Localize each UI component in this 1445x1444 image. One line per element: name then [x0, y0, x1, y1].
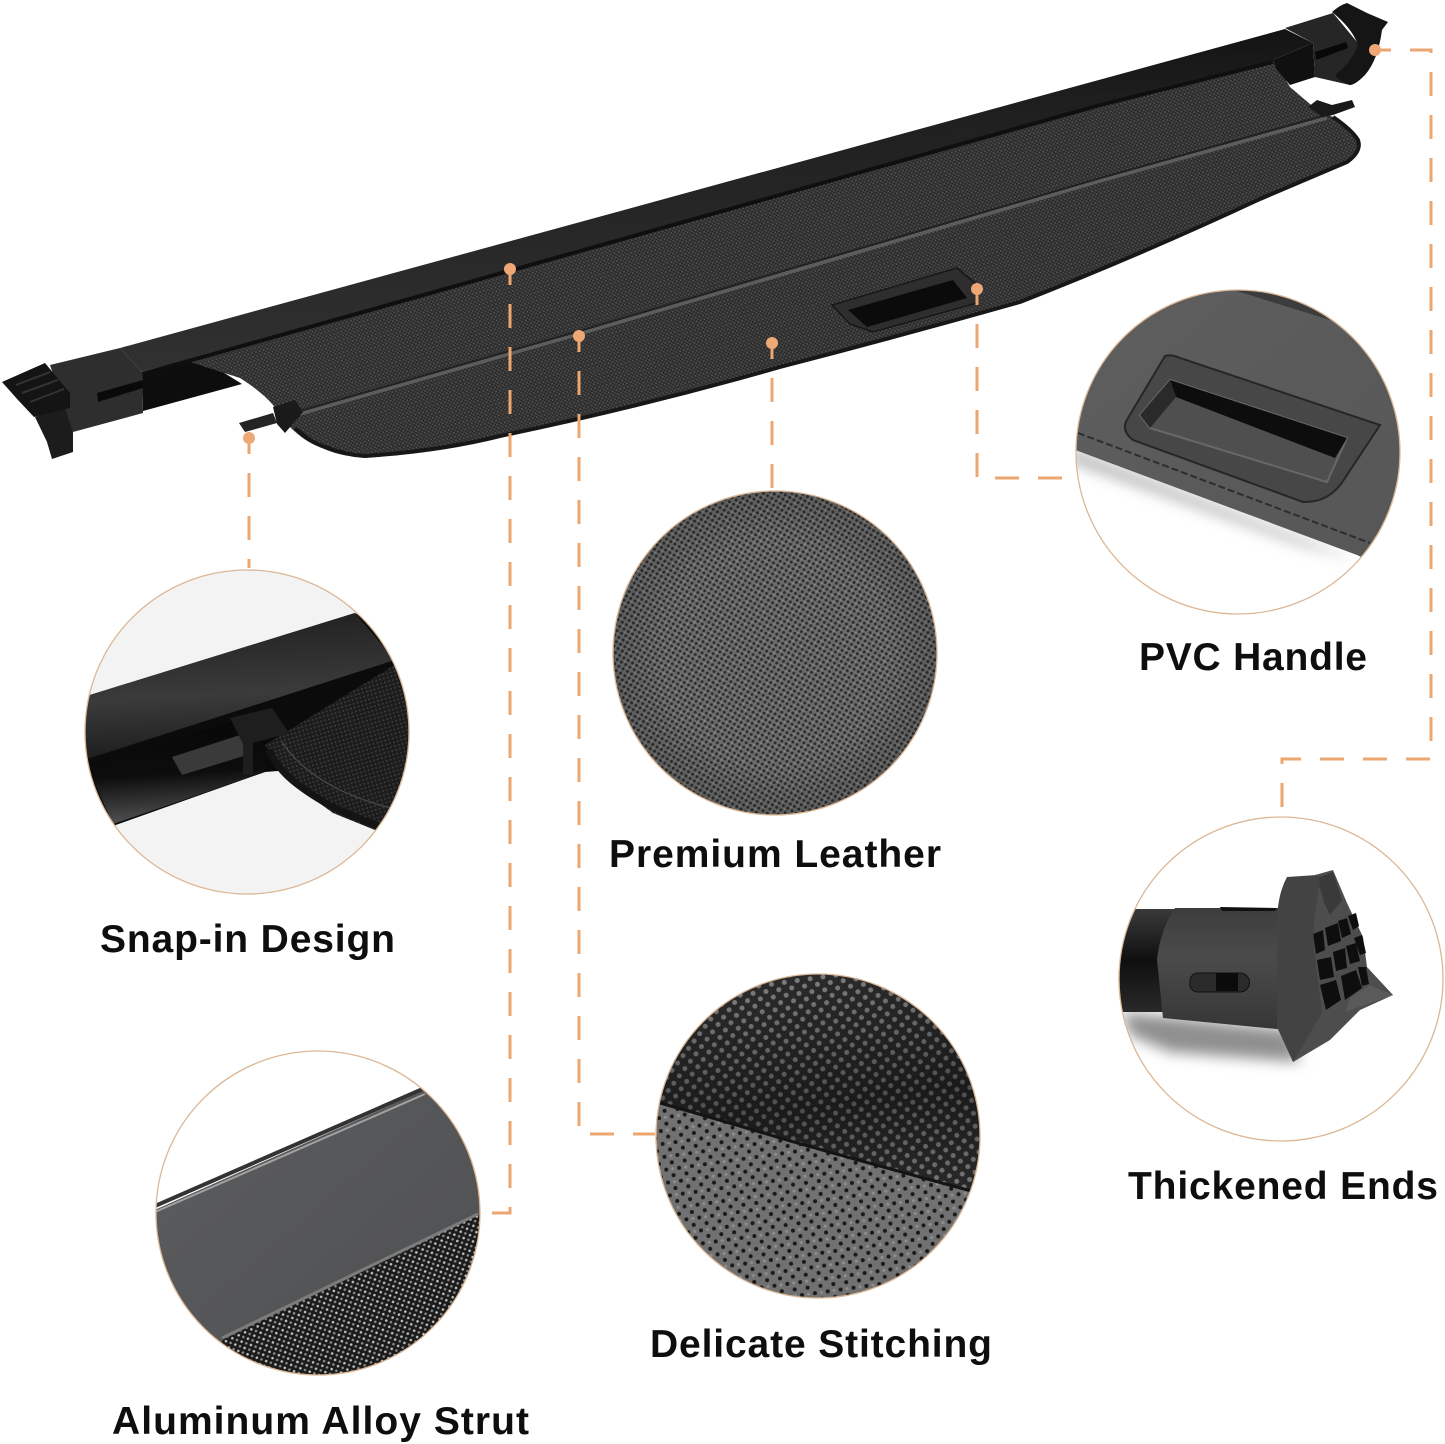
- ring: [156, 1051, 480, 1375]
- detail photo: stitched seam: [650, 970, 985, 1305]
- label: Premium Leather: [609, 833, 941, 876]
- ring: [85, 570, 409, 894]
- panel: pvc handle: [1070, 285, 1410, 679]
- ring: [1119, 817, 1443, 1141]
- detail photo: strut: [156, 1088, 480, 1374]
- detail photo: handle: [1076, 290, 1400, 558]
- detail photo: leather mesh: [610, 488, 940, 818]
- panel: premium leather: [609, 488, 941, 876]
- panel: delicate stitching: [650, 970, 992, 1366]
- label: Delicate Stitching: [650, 1323, 992, 1366]
- label: PVC Handle: [1139, 636, 1367, 679]
- panel: thickened ends: [1115, 812, 1445, 1208]
- product: cargo cover: [2, 3, 1388, 459]
- rim: [1277, 875, 1322, 1062]
- label: Aluminum Alloy Strut: [112, 1400, 529, 1443]
- connector dots: [243, 44, 1381, 444]
- support rod: [120, 29, 1313, 372]
- ring: [613, 491, 937, 815]
- leader lines: [249, 50, 1431, 1213]
- fabric handle: [832, 268, 977, 332]
- fabric border and seam: [295, 115, 1359, 456]
- label: Thickened Ends: [1128, 1165, 1438, 1208]
- detail photo: snap clip: [80, 565, 420, 900]
- ring: [1076, 290, 1400, 614]
- left end cap: [2, 348, 242, 459]
- panel: snap-in design: [80, 565, 420, 961]
- left snap tab: [239, 400, 303, 433]
- face with ribs: [1293, 870, 1393, 1062]
- panel: aluminum alloy strut: [112, 1045, 529, 1443]
- ring: [656, 974, 980, 1298]
- label: Snap-in Design: [100, 918, 395, 961]
- detail photo: end cap: [1120, 870, 1393, 1070]
- fabric panel: [190, 42, 1359, 457]
- right end cap: [1273, 3, 1388, 117]
